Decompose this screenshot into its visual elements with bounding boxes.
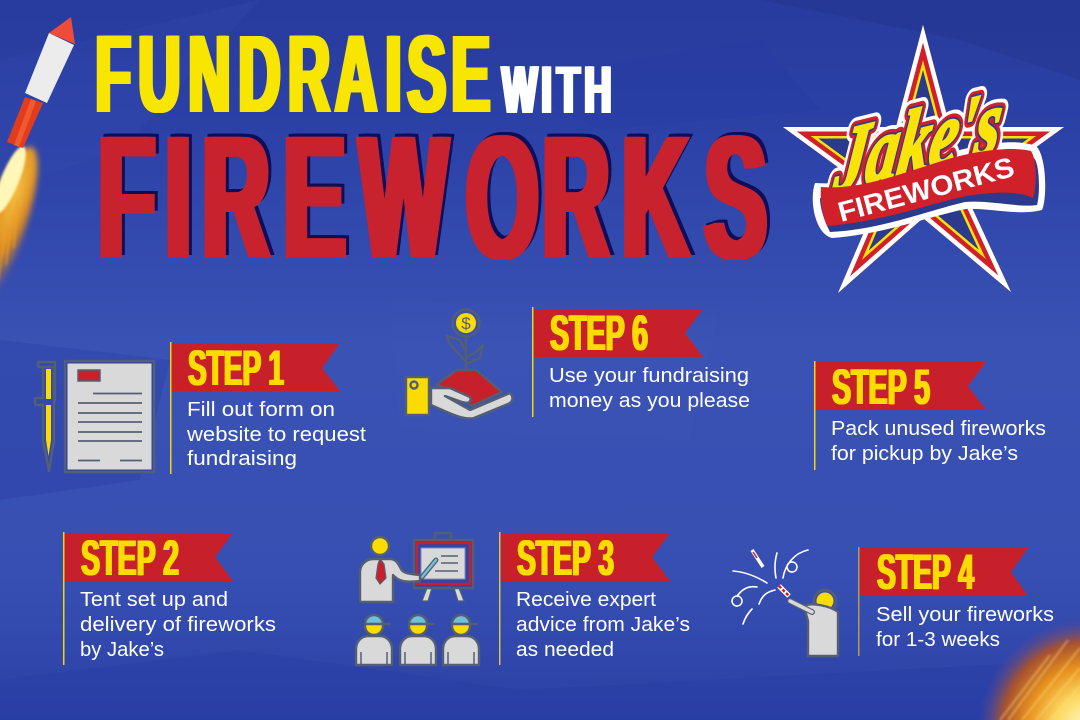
step label: STEP 5 (832, 359, 930, 415)
ribbon (815, 362, 986, 410)
description (80, 588, 276, 661)
icon: presenter and audience (356, 533, 479, 665)
description: Receive expert (516, 588, 656, 611)
heading shadow: Fireworks: FIREWORKS (101, 96, 770, 292)
star (783, 25, 1064, 293)
step label: STEP 3 (517, 530, 614, 586)
description: as needed (516, 638, 614, 661)
description (549, 364, 750, 412)
description: Use your fundraising (549, 364, 749, 387)
description: Sell your fireworks (876, 603, 1054, 626)
step label: STEP 4 (877, 544, 974, 600)
divider (63, 532, 64, 665)
title (95, 12, 770, 295)
divider (170, 342, 172, 474)
wordmark: Jake's (828, 68, 1009, 214)
icon: rocket with flame (0, 17, 75, 309)
description: for pickup by Jake’s (831, 442, 1018, 465)
banner ribbon (821, 149, 1036, 226)
audience (356, 615, 479, 665)
description: for 1-3 weeks (876, 628, 1000, 651)
banner shadow (820, 158, 1039, 232)
wordmark halo: Jake's (828, 68, 1009, 214)
description: fundraising (187, 447, 297, 470)
description: money as you please (549, 389, 750, 412)
description (831, 417, 1046, 465)
heading: Fireworks: FIREWORKS (98, 99, 767, 295)
step 4 (732, 544, 1054, 656)
corner flame (975, 615, 1080, 720)
ribbon (501, 533, 670, 581)
ribbon (64, 533, 233, 581)
banner outline (813, 142, 1045, 238)
ribbon (171, 343, 340, 391)
divider (532, 307, 534, 417)
icon: person lighting firework (732, 550, 838, 656)
icon: money plant in hand: $ (461, 314, 471, 333)
step label: STEP 1 (188, 340, 284, 396)
divider (499, 532, 500, 665)
ribbon (860, 548, 1028, 596)
description: delivery of fireworks (80, 613, 276, 636)
icon: money plant in hand (406, 310, 512, 418)
description: Pack unused fireworks (831, 417, 1046, 440)
step 3 (356, 530, 690, 665)
banner text: FIREWORKS (835, 151, 1017, 228)
description (516, 588, 690, 661)
divider (858, 547, 860, 656)
description: Tent set up and (80, 588, 228, 611)
icon: form and pen (35, 361, 154, 472)
description: Fill out form on (187, 398, 335, 421)
step 5 (814, 359, 1046, 470)
description: by Jake’s (80, 638, 164, 661)
description: advice from Jake’s (516, 613, 690, 636)
step label: STEP 6 (550, 305, 648, 361)
step label: STEP 2 (81, 530, 179, 586)
description: website to request (186, 423, 366, 446)
ribbon (534, 309, 703, 357)
wordmark navy edge: Jake's (828, 68, 1009, 214)
wordmark red edge: Jake's (828, 68, 1009, 214)
divider (814, 361, 816, 470)
description (876, 603, 1054, 651)
step 6 (406, 305, 750, 418)
step 2 (63, 530, 276, 665)
step 1 (35, 340, 366, 474)
description (186, 398, 366, 470)
heading: with: WITH (502, 51, 611, 128)
logo: Jake's Fireworks star (783, 25, 1064, 293)
heading: Fundraise: FUNDRAISE (95, 12, 490, 136)
